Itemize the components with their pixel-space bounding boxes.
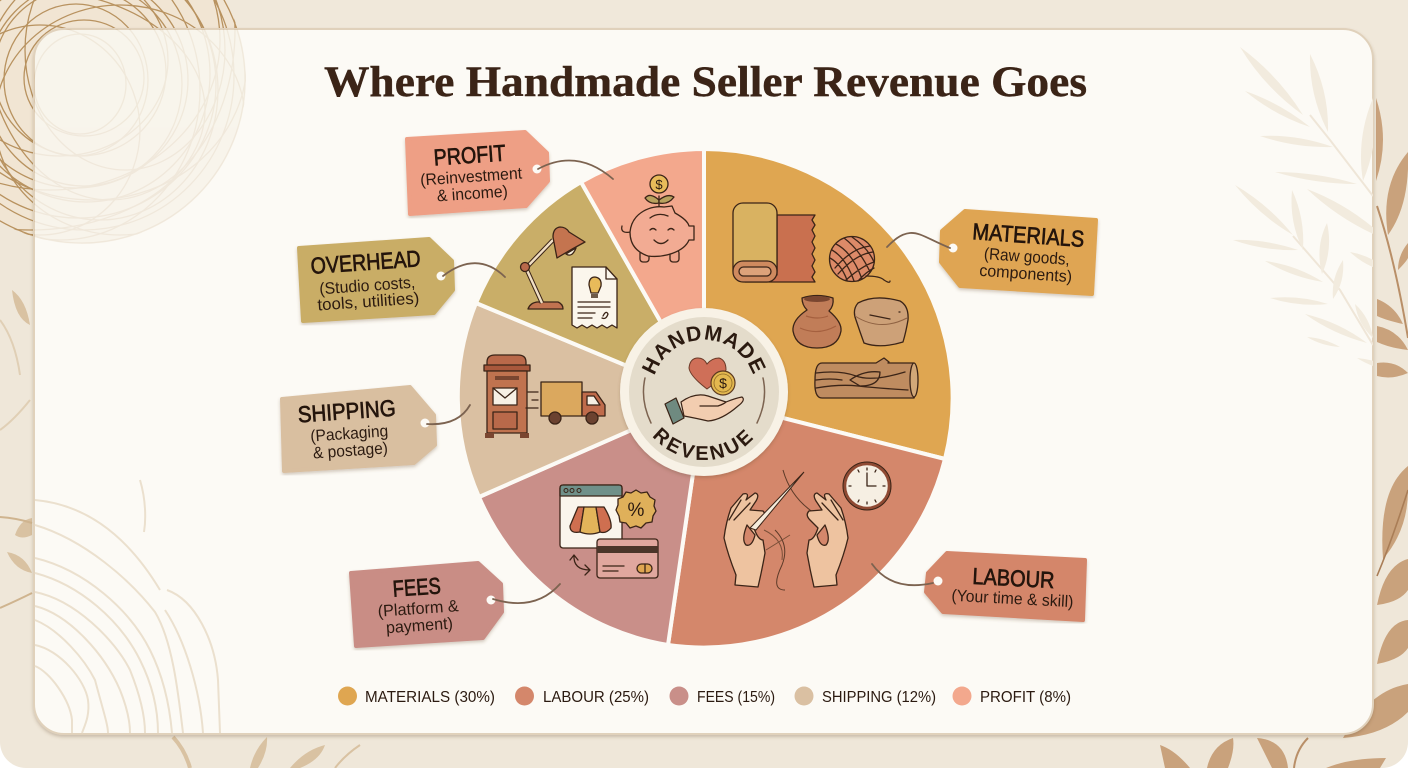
legend item: shipping — [794, 686, 936, 706]
icon: piggy bank: $ — [655, 177, 663, 192]
tag: overhead: OVERHEAD — [310, 245, 421, 279]
tag: profit — [407, 132, 613, 214]
browser window — [560, 485, 622, 548]
legend item: profit — [952, 686, 1071, 706]
badge label: revenue: REVENUE — [652, 427, 754, 460]
icon: sewing hands — [724, 470, 848, 590]
decoration: wood rings top left — [0, 0, 247, 244]
icon: left hand — [724, 493, 765, 587]
decoration: brown leaves right edge — [1160, 98, 1408, 768]
icon: dollar coin — [711, 371, 735, 395]
decoration: faint leaves inside card — [1234, 48, 1373, 366]
credit card — [597, 539, 658, 578]
tag: materials: MATERIALS — [972, 218, 1085, 252]
tag: materials — [887, 211, 1096, 294]
tag: shipping: (Packaging — [310, 422, 389, 446]
icon: online shop fees: % — [628, 500, 645, 521]
legend — [338, 686, 1071, 706]
centre badge — [618, 308, 789, 479]
icon: desk lamp — [520, 227, 585, 309]
icon: heart — [689, 358, 726, 389]
tag: fees: (Platform & — [377, 597, 459, 621]
legend item: labour — [515, 686, 649, 706]
tag: profit: (Reinvestment — [420, 164, 523, 190]
tag: shipping: & postage) — [312, 439, 388, 462]
legend item: fees: FEES (15%) — [697, 689, 775, 706]
shop awning — [570, 507, 584, 532]
tag: overhead: tools, utilities) — [317, 289, 420, 314]
decoration: faint tree rings bottom left — [35, 480, 220, 733]
legend item: labour: LABOUR (25%) — [543, 689, 649, 706]
icon: wood log — [815, 358, 918, 398]
tag: profit: & income) — [436, 182, 508, 205]
tag: overhead: (Studio costs, — [319, 274, 416, 298]
legend item: materials — [338, 686, 495, 706]
tag: labour — [872, 553, 1085, 620]
title: Where Handmade Seller Revenue Goes — [324, 59, 1087, 106]
icon: dollar coin: $ — [719, 375, 727, 391]
tag: fees: FEES — [392, 572, 442, 602]
legend item: profit: PROFIT (8%) — [980, 689, 1071, 706]
slice: shipping — [458, 303, 704, 497]
legend item: shipping: SHIPPING (12%) — [822, 689, 936, 706]
tag: labour: (Your time & skill) — [951, 587, 1074, 611]
decoration: faint wood rings inside card — [34, 29, 246, 244]
badge label: handmade: HANDMADE — [642, 325, 766, 374]
icon: delivery truck — [526, 382, 605, 424]
decoration: leaves bottom and left edge — [0, 290, 360, 768]
tag: materials: (Raw goods, — [983, 245, 1070, 269]
icon: online shop fees — [560, 485, 658, 578]
slice: labour — [668, 398, 945, 648]
pie chart — [458, 149, 953, 648]
icon: invoice with lightbulb — [572, 267, 617, 328]
legend item: materials: MATERIALS (30%) — [365, 689, 495, 706]
tag: profit: PROFIT — [433, 140, 506, 171]
icon: piggy bank — [622, 175, 694, 262]
slice: profit — [581, 149, 704, 398]
percent badge — [616, 490, 656, 528]
icon: needle — [750, 472, 804, 530]
slice: overhead — [476, 182, 704, 398]
icon: wall clock — [843, 462, 891, 510]
icon: post box — [484, 355, 530, 438]
legend item: fees — [670, 686, 775, 706]
icon: fabric roll — [733, 203, 815, 282]
tag: fees — [351, 563, 560, 646]
transfer arrows — [570, 555, 590, 575]
icon: yarn ball — [830, 236, 890, 282]
icon: right hand — [807, 493, 848, 587]
slice: fees — [479, 398, 704, 645]
tag: shipping — [282, 387, 470, 471]
tag: labour: LABOUR — [972, 563, 1055, 593]
icon: open hand — [665, 395, 743, 424]
icon: clay pot — [793, 296, 841, 348]
slice: materials — [704, 149, 953, 459]
tag: shipping: SHIPPING — [297, 395, 396, 427]
icon: clay lump — [854, 298, 908, 346]
tag: materials: components) — [979, 262, 1073, 286]
tag: overhead — [299, 239, 505, 321]
tag: fees: payment) — [385, 615, 453, 637]
